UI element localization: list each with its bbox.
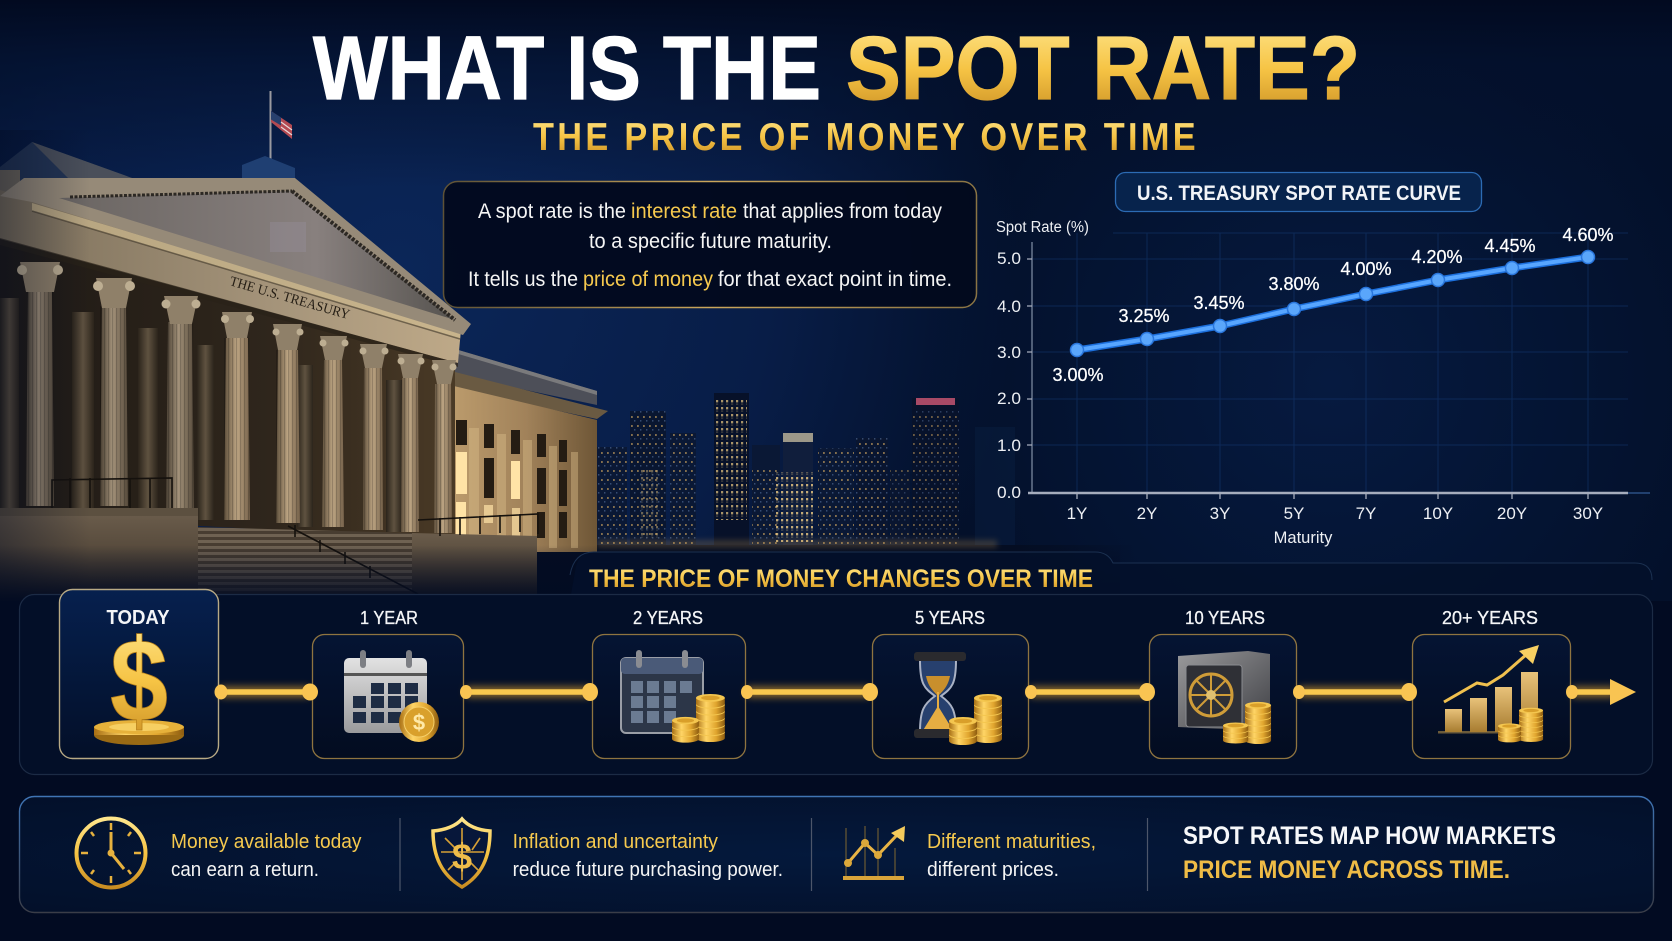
card: 10 years xyxy=(1150,608,1296,758)
x axis labels: 1Y xyxy=(1067,504,1087,523)
data labels: 3.45% xyxy=(1193,293,1245,313)
x axis labels: 5Y xyxy=(1284,504,1304,523)
definition box: price of money xyxy=(583,268,713,291)
conclusion text: SPOT RATES MAP HOW MARKETS xyxy=(1183,822,1556,850)
colonnade xyxy=(17,262,456,533)
curve line xyxy=(1077,257,1588,350)
icon: rising bars with arrow xyxy=(1438,645,1543,742)
data labels: 4.60% xyxy=(1562,225,1614,245)
takeaway text 3 xyxy=(927,831,1096,881)
icon: gold dollar on pedestal: $ xyxy=(110,615,168,747)
title xyxy=(313,19,1360,119)
panel: key takeaways xyxy=(20,796,1654,912)
icon: calendar with coin: $ xyxy=(413,710,425,735)
panel: price of money timeline xyxy=(20,552,1652,774)
treasury building xyxy=(0,91,608,604)
ground fade xyxy=(0,545,1672,941)
data labels: 4.00% xyxy=(1340,259,1392,279)
icon: line chart xyxy=(843,826,905,880)
card: 2 years xyxy=(592,608,746,758)
card: 1 year xyxy=(312,608,464,758)
x axis labels: 10Y xyxy=(1423,504,1453,523)
arrow head xyxy=(1610,679,1636,705)
takeaway text 1: Money available today xyxy=(171,831,362,853)
flag xyxy=(270,91,292,159)
wing xyxy=(418,349,608,552)
icon: calendar with coin xyxy=(344,650,439,742)
curve highlight xyxy=(1077,257,1588,350)
y axis labels: 1.0 xyxy=(997,436,1021,455)
card: 5 years xyxy=(872,608,1028,758)
left edge vignette xyxy=(0,130,90,600)
card: 10 years: 10 YEARS xyxy=(1185,608,1265,628)
conclusion text xyxy=(1183,822,1556,884)
icon: shield xyxy=(433,819,490,887)
axis label: maturity: Maturity xyxy=(1274,529,1333,547)
subtitle: THE PRICE OF MONEY OVER TIME xyxy=(533,115,1196,158)
y axis labels xyxy=(997,249,1021,502)
axis label: spot rate: Spot Rate (%) xyxy=(996,219,1089,236)
x axis labels: 7Y xyxy=(1356,504,1376,523)
title: WHAT IS THE xyxy=(313,19,821,119)
x axis labels: 20Y xyxy=(1497,504,1527,523)
data labels: 4.20% xyxy=(1411,247,1463,267)
pediment xyxy=(0,178,471,335)
x axis labels: 3Y xyxy=(1210,504,1230,523)
y axis labels: 5.0 xyxy=(997,249,1021,268)
y axis labels: 3.0 xyxy=(997,343,1021,362)
data labels: 3.25% xyxy=(1118,306,1170,326)
definition box: A spot rate is the xyxy=(478,200,626,223)
definition box: interest rate xyxy=(631,200,737,223)
x axis labels: 2Y xyxy=(1137,504,1157,523)
chart title pill: U.S. TREASURY SPOT RATE CURVE xyxy=(1137,181,1461,205)
card: 5 years: 5 YEARS xyxy=(915,608,985,628)
y axis labels: 2.0 xyxy=(997,389,1021,408)
card: 20+ years: 20+ YEARS xyxy=(1442,608,1538,628)
recess behind colonnade xyxy=(0,235,455,540)
takeaway text 3: Different maturities, xyxy=(927,831,1096,853)
chart title pill xyxy=(1116,172,1482,212)
takeaway text 3: different prices. xyxy=(927,859,1059,881)
card: today: TODAY xyxy=(106,607,170,629)
card: 20+ years xyxy=(1412,608,1570,758)
definition box: for that exact point in time. xyxy=(718,268,952,291)
title: SPOT RATE? xyxy=(846,19,1360,119)
entablature xyxy=(0,190,461,363)
inscription: THE U.S. TREASURY xyxy=(228,274,351,323)
x axis labels: 30Y xyxy=(1573,504,1603,523)
definition box: to a specific future maturity. xyxy=(589,230,832,253)
icon: dark calendar with coins xyxy=(621,650,725,743)
data labels: 3.00% xyxy=(1052,365,1104,385)
definition box: that applies from today xyxy=(743,200,942,223)
card: 1 year: 1 YEAR xyxy=(360,608,418,628)
takeaway text 1 xyxy=(171,831,362,881)
data points xyxy=(1070,250,1594,356)
y axis labels: 4.0 xyxy=(997,297,1021,316)
x axis labels xyxy=(1067,504,1603,523)
takeaway text 2: Inflation and uncertainty xyxy=(513,831,718,853)
line chart: spot rate curve xyxy=(996,219,1650,547)
city skyline xyxy=(535,393,1135,605)
icon: safe with coins xyxy=(1178,651,1271,744)
takeaway text 1: can earn a return. xyxy=(171,859,319,881)
takeaway text 2: reduce future purchasing power. xyxy=(513,859,783,881)
data labels: 3.80% xyxy=(1268,274,1320,294)
connectors xyxy=(214,679,1636,705)
icon: clock xyxy=(76,818,146,888)
takeaway text 2 xyxy=(513,831,783,881)
icon: shield: $ xyxy=(452,836,472,877)
y axis labels: 0.0 xyxy=(997,483,1021,502)
definition box xyxy=(444,182,976,308)
card: today xyxy=(60,590,218,758)
definition box: It tells us the xyxy=(468,268,578,291)
conclusion text: PRICE MONEY ACROSS TIME. xyxy=(1183,856,1510,884)
timeline heading: THE PRICE OF MONEY CHANGES OVER TIME xyxy=(589,565,1093,593)
data labels xyxy=(1052,225,1614,385)
plinth and steps xyxy=(0,478,538,604)
icon: hourglass with coins xyxy=(914,652,1002,745)
card: 2 years: 2 YEARS xyxy=(633,608,703,628)
data labels: 4.45% xyxy=(1484,236,1536,256)
